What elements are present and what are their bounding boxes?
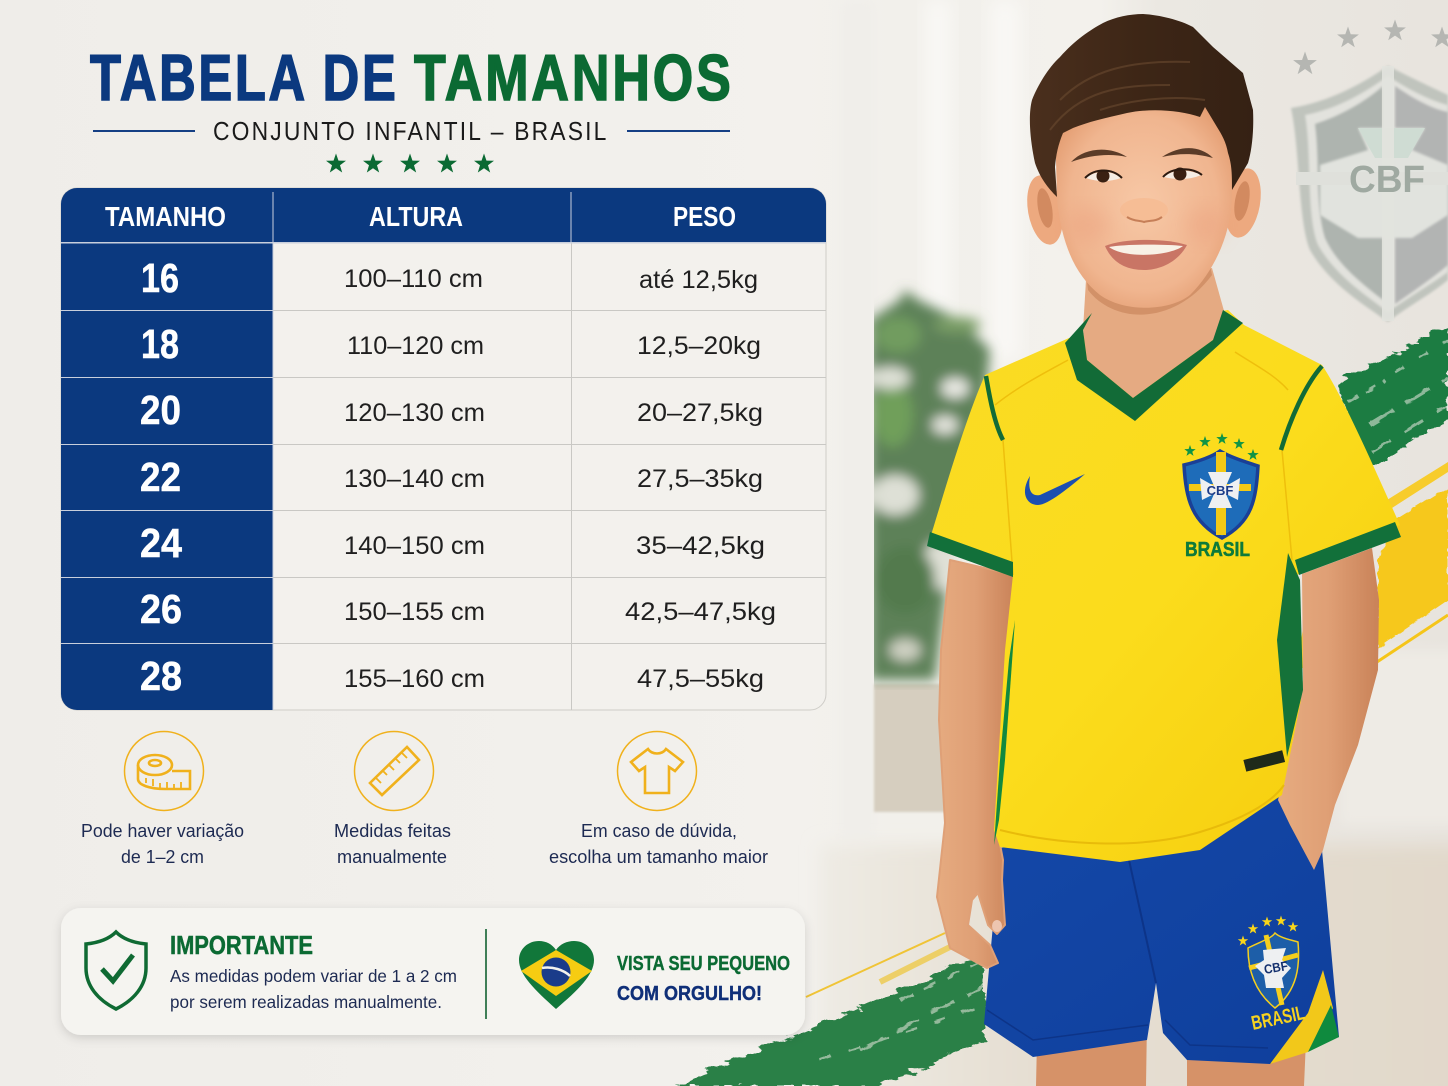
mouth xyxy=(1105,240,1187,270)
row 28: 28 xyxy=(140,653,182,699)
sleeve trim right xyxy=(1281,366,1322,450)
boy figure xyxy=(927,14,1401,1086)
jersey: BRASIL xyxy=(1185,539,1250,561)
row 22 xyxy=(140,454,763,500)
brush stroke: green and yellow bottom xyxy=(675,933,985,1086)
row 20: 20 xyxy=(140,387,181,433)
right arm xyxy=(1278,548,1379,870)
note text xyxy=(549,821,768,867)
panel: important notice xyxy=(61,908,805,1035)
important text: As medidas podem variar de 1 a 2 cm xyxy=(170,966,457,986)
important text xyxy=(170,930,457,1012)
shorts: CBF xyxy=(1263,958,1289,977)
row 22: 27,5–35kg xyxy=(637,465,763,493)
row 28: 155–160 cm xyxy=(344,665,485,693)
note text: escolha um tamanho maior xyxy=(549,847,768,867)
slogan xyxy=(617,953,790,1005)
watermark: CBF crest: CBF xyxy=(1349,159,1425,201)
row 26: 42,5–47,5kg xyxy=(625,598,776,626)
shorts: BRASIL xyxy=(1249,1002,1307,1035)
note: measuring tape xyxy=(81,732,244,867)
note: ruler xyxy=(334,732,451,867)
ears xyxy=(1022,166,1266,247)
row 18: 18 xyxy=(141,321,179,367)
note text: Em caso de dúvida, xyxy=(581,821,737,841)
brush stroke: green and yellow right xyxy=(1302,325,1448,668)
hem line xyxy=(1000,785,1284,844)
important text: IMPORTANTE xyxy=(170,930,313,960)
crest stars xyxy=(1184,433,1259,460)
row 20: 20–27,5kg xyxy=(637,399,763,427)
icon: ruler xyxy=(354,732,434,810)
row 18 xyxy=(141,321,761,367)
nose xyxy=(1120,198,1168,222)
important text: por serem realizadas manualmente. xyxy=(170,992,442,1012)
row 18: 110–120 cm xyxy=(347,332,484,360)
row 26: 150–155 cm xyxy=(344,598,485,626)
five stars xyxy=(326,154,494,172)
left cuff xyxy=(927,532,1013,577)
chest crest xyxy=(1184,451,1258,538)
table header: PESO xyxy=(673,201,736,232)
row 28 xyxy=(140,653,764,699)
shorts xyxy=(984,795,1339,1064)
row 16: 16 xyxy=(141,255,179,301)
cheek blush xyxy=(1066,207,1225,243)
icon: t-shirt xyxy=(618,732,696,810)
row 22: 130–140 cm xyxy=(344,465,485,493)
note text: manualmente xyxy=(337,847,447,867)
subtitle: CONJUNTO INFANTIL – BRASIL xyxy=(213,118,606,146)
face xyxy=(1055,100,1232,308)
title: TABELA DE xyxy=(90,42,396,114)
right cuff xyxy=(1295,522,1401,575)
row 18: 12,5–20kg xyxy=(637,332,761,360)
eyes xyxy=(1085,168,1202,182)
hair xyxy=(1030,14,1253,197)
note text: Pode haver variação xyxy=(81,821,244,841)
note text: de 1–2 cm xyxy=(121,847,204,867)
note text xyxy=(334,821,451,867)
row 16: até 12,5kg xyxy=(639,266,758,294)
icon: Brazil flag heart xyxy=(519,941,594,1009)
note text xyxy=(81,821,244,867)
row 24 xyxy=(140,520,765,566)
eyebrows xyxy=(1071,148,1213,162)
row 20: 120–130 cm xyxy=(344,399,485,427)
neck xyxy=(1083,265,1226,398)
legs xyxy=(1036,1020,1306,1086)
icon: shield check xyxy=(86,932,146,1009)
collar xyxy=(1065,310,1243,421)
note: t-shirt xyxy=(549,732,768,867)
row 24: 24 xyxy=(140,520,182,566)
row 26: 26 xyxy=(140,586,182,632)
table header: TAMANHO xyxy=(105,201,226,232)
table header: ALTURA xyxy=(369,201,463,232)
plant pot xyxy=(874,684,946,812)
row 20 xyxy=(140,387,763,433)
icon: measuring tape xyxy=(124,732,204,810)
row 16 xyxy=(141,255,758,301)
slogan: VISTA SEU PEQUENO xyxy=(617,953,790,975)
row 22: 22 xyxy=(140,454,181,500)
sleeve trim left xyxy=(986,376,1003,440)
sleeve seams xyxy=(995,352,1292,575)
row 26 xyxy=(140,586,776,632)
row 24: 35–42,5kg xyxy=(636,532,765,560)
title xyxy=(90,42,731,114)
watermark: CBF crest xyxy=(1291,20,1448,322)
swoosh xyxy=(1025,474,1085,505)
title: TAMANHOS xyxy=(414,43,731,114)
label patch xyxy=(1243,750,1285,772)
row 24: 140–150 cm xyxy=(344,532,485,560)
row 28: 47,5–55kg xyxy=(637,665,764,693)
jersey xyxy=(927,310,1401,862)
left arm and hand xyxy=(937,560,1015,968)
blurred plant xyxy=(870,290,990,680)
note text: Medidas feitas xyxy=(334,821,451,841)
background: room scene xyxy=(846,0,1448,1086)
row 16: 100–110 cm xyxy=(344,265,483,293)
jersey: CBF xyxy=(1207,483,1233,498)
table header xyxy=(105,201,736,232)
size table xyxy=(61,188,826,710)
slogan: COM ORGULHO! xyxy=(617,983,762,1005)
